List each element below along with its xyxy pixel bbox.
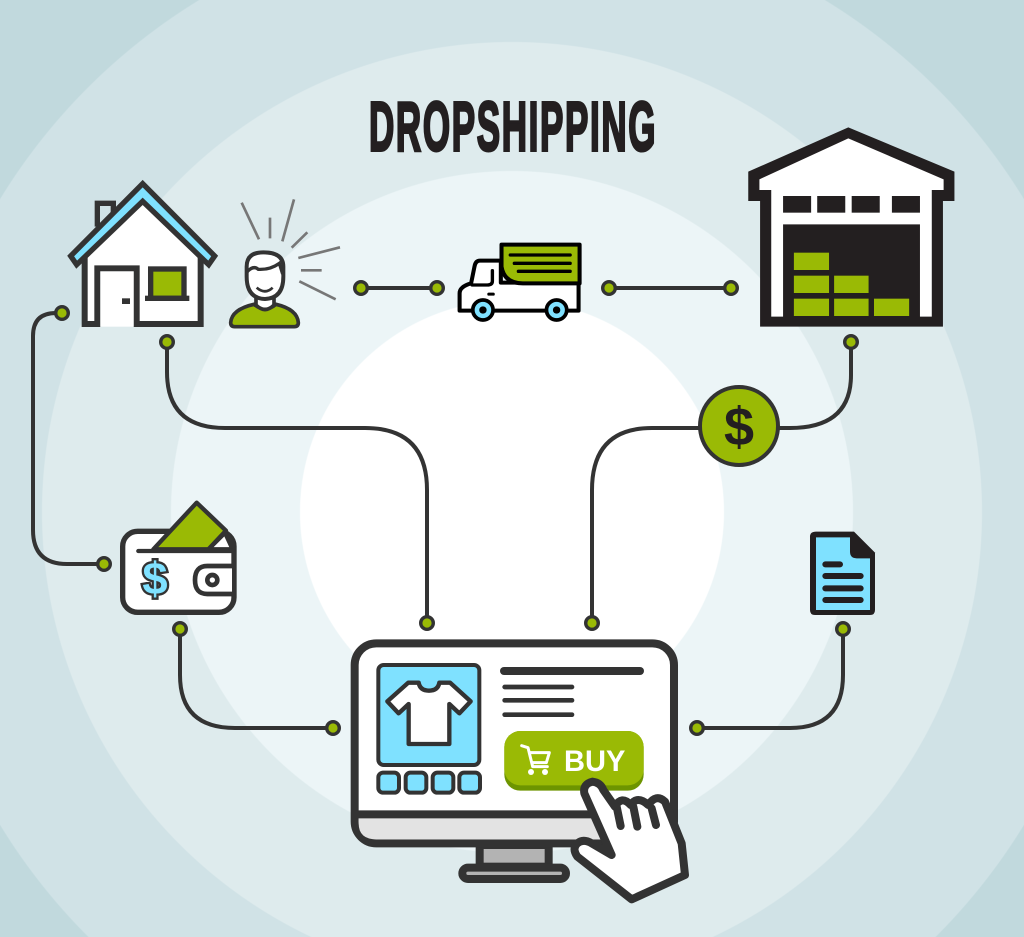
icon: dollar coin [700, 387, 778, 465]
product image [378, 665, 480, 793]
icon: wallet: $ [142, 553, 168, 604]
buy button [504, 731, 644, 791]
connector nodes [56, 282, 857, 734]
product description lines [504, 671, 640, 715]
connectors [33, 288, 851, 728]
monitor stand [462, 845, 566, 879]
icon: wallet [123, 503, 234, 612]
title: DROPSHIPPING [369, 87, 657, 166]
icon: computer monitor [355, 643, 685, 899]
icon: document [810, 532, 875, 615]
icon: dollar coin: $ [724, 397, 754, 457]
icon: delivery truck [460, 245, 580, 320]
buy button: BUY [564, 745, 626, 778]
icon: pointing hand [574, 782, 685, 899]
icon: customer [231, 199, 340, 327]
monitor screen [355, 643, 674, 843]
icon: house [71, 184, 215, 327]
icon: warehouse [748, 127, 954, 327]
